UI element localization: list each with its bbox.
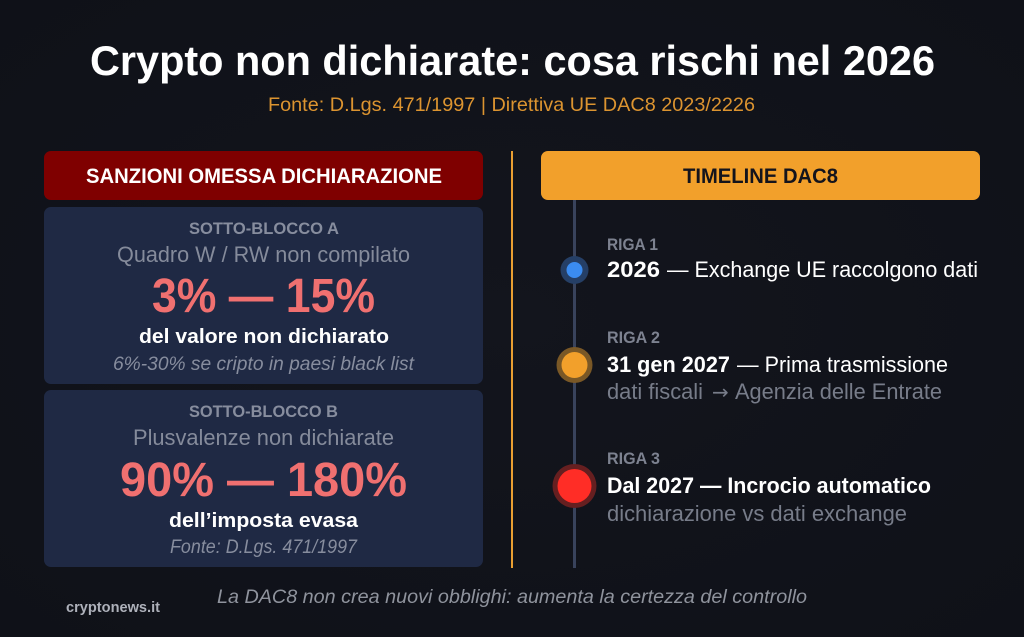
stat caption A: del valore non dichiarato [139,325,389,348]
row text 1: — Exchange UE raccolgono dati [667,257,978,282]
row text 2: — Prima trasmissione [737,352,948,377]
row text 1: 2026 [607,257,660,282]
heading: sanctions [44,151,483,200]
row label 3: RIGA 3 [607,449,660,468]
timeline item 3 [552,449,931,526]
row text 2: 31 gen 2027 [607,352,730,377]
marker 1 [560,256,588,284]
timeline axis [573,200,576,568]
row detail 2: → [712,380,729,404]
panel: sanctions [44,151,483,567]
row detail 2 [607,379,942,404]
logo: cryptonews.it: cryptonews.it [66,599,160,616]
stat: 90% to 180%: 90% — 180% [120,454,407,507]
heading: timeline [541,151,980,200]
note B: Fonte: D.Lgs. 471/1997 [170,536,358,558]
row detail 2: Agenzia delle Entrate [735,379,942,404]
title: Crypto non dichiarate: cosa rischi nel 2026 [90,37,935,84]
stat: 3% to 15%: 3% — 15% [152,270,375,323]
row detail 3: dichiarazione vs dati exchange [607,501,907,526]
row label 2: RIGA 2 [607,328,660,347]
note A: 6%-30% se cripto in paesi black list [113,353,416,375]
heading: timeline: TIMELINE DAC8 [683,165,838,188]
row label 1: RIGA 1 [607,235,658,254]
heading: sanctions: SANZIONI OMESSA DICHIARAZIONE [86,165,442,188]
marker 3 [552,464,596,508]
timeline item 1 [560,235,978,284]
marker 2 [556,347,592,383]
row text 2 [607,352,948,377]
panel: timeline [541,151,980,568]
stat caption B: dell’imposta evasa [169,509,359,532]
timeline item 2 [556,328,948,404]
row text 3: Dal 2027 — Incrocio automatico [607,473,931,498]
card: sub-block A [44,207,483,384]
card label A: SOTTO-BLOCCO A [189,219,339,238]
footer note: La DAC8 non crea nuovi obblighi: aumenta la certezza del controllo [217,586,807,608]
card subtitle A: Quadro W / RW non compilato [117,242,410,267]
card label B: SOTTO-BLOCCO B [189,402,338,421]
row detail 2: dati fiscali [607,379,703,404]
card: sub-block B [44,390,483,567]
card subtitle B: Plusvalenze non dichiarate [133,425,394,450]
subtitle: sources: Fonte: D.Lgs. 471/1997 | Direttiva UE DAC8 2023/2226 [268,94,755,116]
